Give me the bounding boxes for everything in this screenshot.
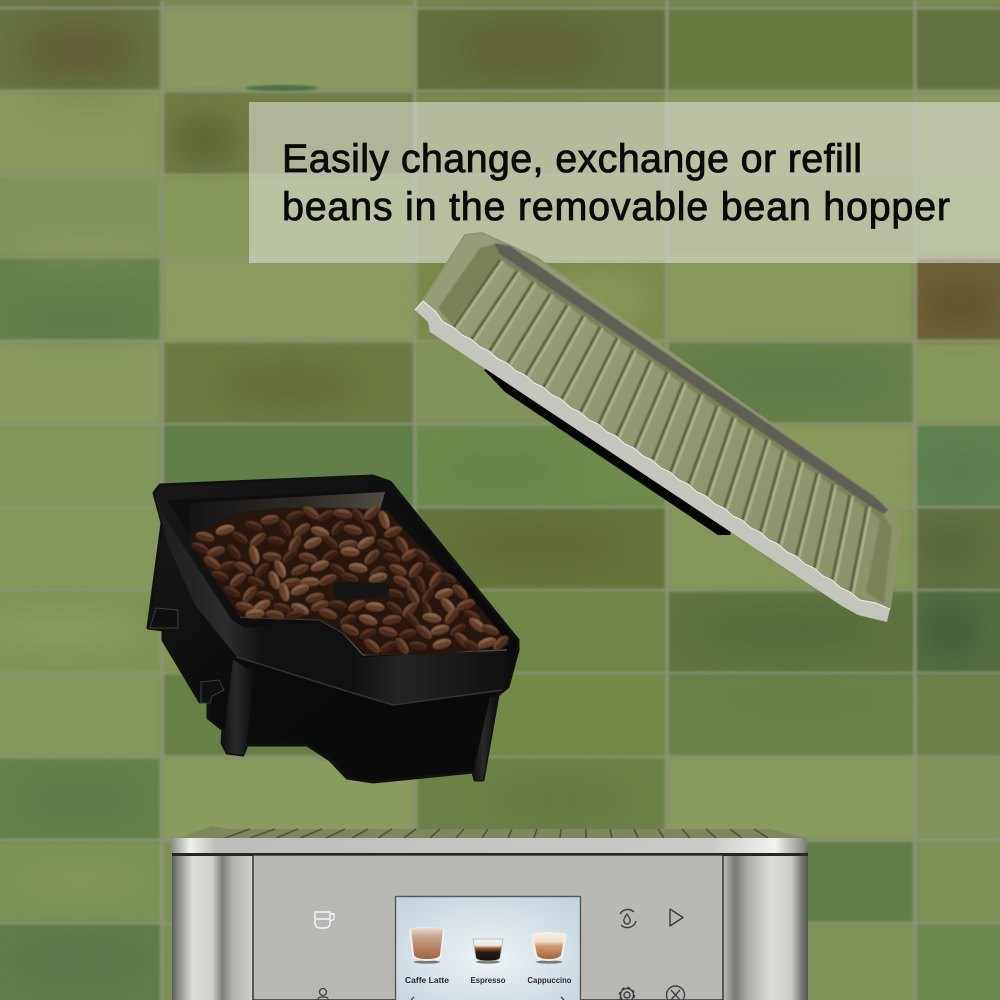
drink labels: Cappuccino [528, 976, 572, 985]
hopper upper clip [150, 608, 178, 628]
screen chevrons [411, 997, 564, 1000]
icon: settings gear [620, 988, 634, 1000]
lid edge highlight [415, 301, 890, 609]
hopper bean tab [333, 582, 389, 600]
drink labels: Espresso [470, 976, 506, 985]
drink: espresso [473, 939, 503, 964]
removed hopper lid [415, 233, 900, 622]
drink labels [405, 976, 572, 985]
icon: play [670, 909, 683, 926]
lid ribs [453, 260, 870, 594]
icon: cup [315, 912, 334, 928]
drink: caffe latte [409, 927, 445, 964]
drink: cappuccino [531, 932, 567, 964]
icon: descale refresh [620, 910, 636, 928]
lid inner wall [438, 244, 892, 604]
translucent caption panel [249, 102, 1000, 263]
hopper right leg [473, 696, 498, 780]
hopper inner wall [167, 490, 507, 655]
hopper front column [223, 660, 254, 755]
lid underside shadow [484, 360, 735, 535]
hopper moulded crease [237, 657, 502, 705]
lid silver front edge [415, 301, 890, 622]
heading: beans in the removable bean hopper [282, 185, 950, 229]
machine shadow line [172, 853, 808, 856]
machine left steel column [172, 852, 253, 1000]
screen background [396, 896, 580, 1000]
machine right steel column [723, 852, 808, 1000]
lid dark rim [494, 243, 888, 514]
machine control panel [253, 855, 723, 1000]
bean hopper [148, 476, 518, 782]
touch screen [396, 896, 580, 1000]
hopper wall gloss [188, 492, 385, 538]
coffee beans [188, 503, 511, 657]
icon: user profile [318, 988, 328, 1000]
hopper outer silhouette [148, 476, 518, 782]
lid tray [415, 233, 900, 620]
machine silver top band [171, 838, 807, 853]
machine top ridges [180, 826, 806, 838]
icon: cancel [666, 986, 684, 1000]
hopper rim band [154, 493, 518, 705]
drink labels: Caffe Latte [405, 976, 450, 985]
hopper rim edge [240, 617, 507, 655]
heading: Easily change, exchange or refill [282, 137, 862, 181]
coffee machine [171, 826, 808, 1000]
hopper lower clip [201, 680, 224, 703]
